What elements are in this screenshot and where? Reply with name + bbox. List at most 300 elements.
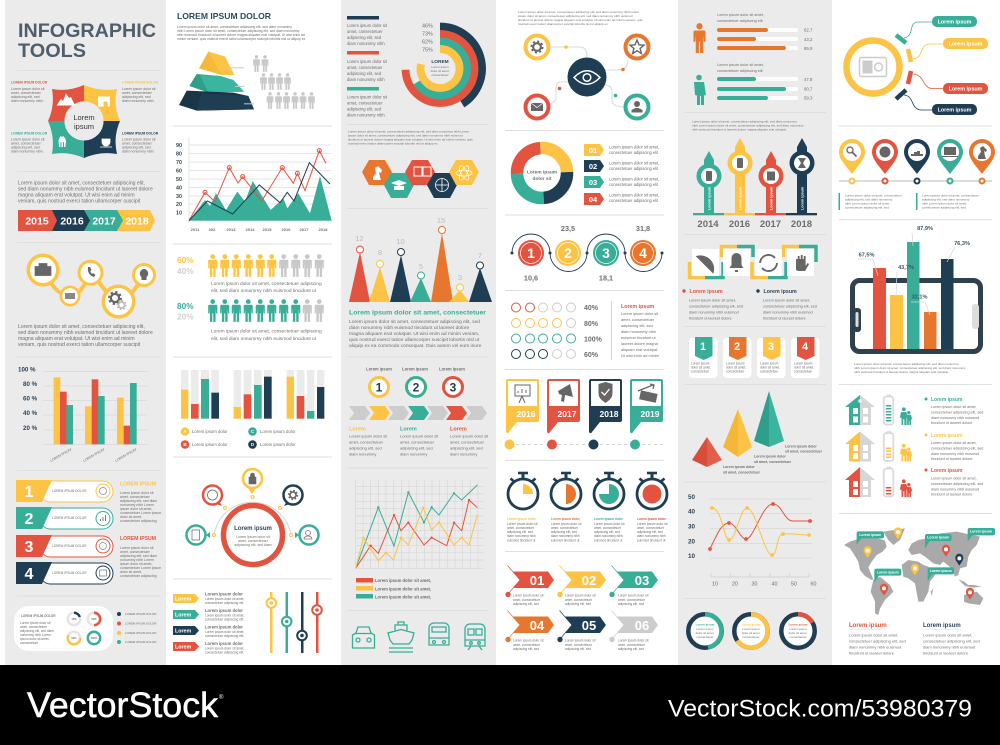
safe diagram: Lorem ipsum [938,108,972,114]
tag 06: adipiscing elit, sed [618,647,644,651]
sliders [266,592,322,653]
arc chart legend: amet, consectetuer [347,100,383,106]
text block: nibh Lorem ipsum dolor sit amet, consectetuer adipiscing elit, sed diam nonummy [692,124,804,128]
row text: diam nonummy nibh euismod [931,488,979,492]
four-part ring diagram: ipsum [74,122,94,131]
tower captions [708,186,804,210]
smooth line chart: 30 [688,524,696,530]
pictogram: 60 / 40 [177,254,324,294]
row: green [845,394,912,425]
tag 03: Lorem ipsum dolor sit [618,594,649,598]
row text: tincidunt ut laoreet dolore [931,457,972,461]
list side text: nonummy nibh Lorem [120,503,154,507]
tag 02: amet, consectetuer [565,598,593,602]
dot rows side text: adipiscing elit, sed [621,323,653,328]
hanging number tags: Lorem ipsum [726,362,745,366]
list side text: LOREM IPSUM [120,482,156,488]
icon: person node [626,96,648,118]
hanging number tags [689,337,820,378]
panel: column 5 [682,13,826,648]
dot rows side text: diam nonummy nibh [621,329,656,334]
stopwatches [508,473,667,509]
two text columns: consectetuer adipiscing elit, sed [689,304,743,308]
stopwatch captions: Lorem ipsum dolor sit [507,522,538,526]
label list: Lorem ipsum dolor [205,641,243,646]
step process: Lorem ipsum [439,366,465,372]
pictogram: 80 / 20: 80% [177,301,194,311]
three ring gauges [688,614,815,648]
icon: car [352,627,374,648]
tag 01: adipiscing elit, sed [513,602,539,606]
tag 04: amet, consectetuer [513,643,541,647]
line and area chart: 60 [176,168,182,174]
dot rows side text: amet, consectetuer [621,317,655,322]
ring labels: adipiscing elit, sed [122,95,151,99]
text block: magna aliquam erat volutpat. Ut wisi enim ad minim [18,336,135,342]
map pins timeline: adipiscing elit, sed diam nonummy [922,198,970,202]
row 4 [16,562,113,584]
watermark url: VectorStock.com/53980379 [668,696,972,722]
stacked bars legend: Lorem ipsum dolor [192,442,228,447]
ring labels: LOREM IPSUM DOLOR [122,80,159,84]
safe diagram: Lorem ipsum [949,42,983,48]
text block: nibh euismod tincidunt ut laoreet dolore magna aliquam erat volutpat. [692,128,787,132]
card: small donuts: LOREM IPSUM DOLOR [21,614,56,618]
phone bar chart: 87,9% [917,226,933,232]
card: small donuts: 15% [71,617,77,621]
line and area chart: 70 [176,160,182,166]
arc chart legend: Lorem ipsum dolor sit [347,94,388,100]
icon: train [465,624,485,650]
map captions: diam nonummy nibh euismod [849,644,901,650]
three ring gauges: Lorem ipsum [696,622,715,626]
label list: Lorem [175,628,191,634]
label list: Lorem ipsum dolor sit amet, [205,597,244,601]
tag 04: 04 [530,618,545,633]
step process: diam nonummy [349,452,376,456]
map captions: consectetuer adipiscing elit, sed [923,638,980,644]
map pins timeline: consectetuer adipiscing elit, sed [922,206,966,210]
hanging number tags: Lorem ipsum [691,362,710,366]
stacked bars legend [181,427,296,449]
two text columns: tincidunt ut laoreet dolore [763,316,806,320]
label list [173,592,244,654]
map pins [857,527,995,600]
ring labels: adipiscing elit, sed [11,95,40,99]
stopwatch captions: Lorem ipsum dolor sit [594,522,625,526]
stopwatch 2 [551,473,581,509]
hub network [526,36,648,118]
tag 05 [557,610,606,651]
tag 03: 03 [635,573,649,588]
bar chart: 20 % [23,425,38,432]
dot rows side text: aliquam erat volutpat. [621,347,658,352]
arc chart legend: adipiscing elit, sed [347,106,382,112]
two text columns: diam nonummy nibh euismod [689,310,739,314]
text block: veniam, quis nostrud exerci tation ullamcorper suscipit [18,342,141,348]
step process: 1 [376,380,383,394]
ring labels: Lorem ipsum dolor sit [11,87,44,91]
3D pyramid [179,52,254,111]
concentric arc chart: consectetuer [431,73,449,77]
row: yellow [845,431,912,462]
map captions: tincidunt ut laoreet dolore [849,650,895,656]
map pins timeline: Lorem ipsum dolor sit amet, consectetuer [922,194,979,198]
smooth line chart: 20 [732,582,738,588]
hanging number tags: 1 [700,341,706,353]
stopwatch captions: euismod tincidunt ut [551,538,579,542]
hanging number tags: 2 [734,341,740,353]
step process: adipiscing elit, sed [349,446,382,450]
hanging number tags: dolor sit amet, [760,366,780,370]
hanging number tags: 4 [802,341,809,353]
tag 01 [505,566,554,606]
card: small donuts: Lorem ipsum dolor sit [20,621,51,625]
bar chart: 100 % [18,366,36,374]
tag 01: Lorem ipsum dolor sit [513,594,544,598]
donut legend: Lorem ipsum dolor sit amet, [609,192,660,198]
line and area chart: 40 [176,186,182,192]
concentric arc chart: 75% [422,48,433,54]
icon: bell [730,253,744,272]
row text: tincidunt ut laoreet dolore [931,421,972,425]
3D cones: sit amet, consectetuer [723,470,761,474]
text block: Lorem ipsum dolor sit amet, consectetuer adipiscing elit, sed diam nonummy [854,362,959,366]
tag 06 [609,610,658,651]
step process: amet, consectetuer [349,440,384,444]
step process: 3 [450,380,457,394]
row text: Lorem ipsum dolor sit amet, [931,441,976,445]
list side text: amet, consectetuer [120,550,151,554]
list side text: consectetuer adipiscing [120,574,157,578]
male bars [694,13,813,53]
numbered circle wave: 23,5 [561,224,575,233]
text block: quis nostrud exerci tation ullamcorper suscipit lobortis nisl ut [349,337,480,343]
concentric arc chart: dolor sit amet, [431,69,450,73]
text block: magna aliquam erat volutpat. Ut wisi enim ad minim [18,192,135,198]
tag 05: adipiscing elit, sed [565,647,591,651]
card: small donuts: consectetuer [20,641,39,645]
pictogram rows: pyramid [253,55,315,109]
line and area chart: 50 [176,177,182,183]
list side text: Lorem ipsum dolor sit [120,491,153,495]
intro text: Lorem ipsum dolor sit amet, consectetuer adipiscing elit, sed diam nonummy [177,25,292,29]
stopwatch captions: adipiscing elit, sed [507,530,533,534]
stopwatch captions: Lorem ipsum dolor sit [551,522,582,526]
concentric arc chart: 73% [422,32,433,38]
donut chart: Lorem ipsum [527,170,557,176]
triangle peak chart: 15 [437,216,445,225]
pictogram: 60 / 40: 60% [177,255,194,265]
tag 04 [505,610,554,651]
year ribbon: 2016 [60,216,84,228]
hexagon chain [362,160,479,198]
card: small donuts: 50% [91,617,97,621]
smooth line chart [688,494,816,588]
stopwatch captions: diam nonummy nibh [551,534,580,538]
row 3: LOREM IPSUM DOLOR [52,544,87,548]
row text: consectetuer adipiscing elit, sed [931,482,983,486]
text block [348,130,473,146]
title: INFOGRAPHIC [18,21,156,42]
text block: Lorem ipsum dolor sit amet, consectetuer adipiscing elit, [18,324,145,330]
tag 01: 01 [530,573,544,588]
map pins timeline: adipiscing elit, sed diam nonummy [845,198,893,202]
world map: Lorem ipsum [930,569,952,573]
donut legend: 01 [589,146,597,155]
text block: Lorem ipsum dolor sit amet, consectetuer adipiscing elit, sed diam nonummy nibh Lorem [348,130,470,134]
tag 06: 06 [635,618,649,633]
two text columns [682,289,817,320]
list side text: dolor sit amet, [120,515,142,519]
card: small donuts: LOREM IPSUM DOLOR [125,612,156,616]
step process: amet, consectetuer [400,440,435,444]
row text: Lorem ipsum dolor sit amet, [931,476,976,480]
card: small donuts: 60% [71,636,77,640]
label list: consectetuer adipiscing elit. [205,634,244,638]
tower arrows: 2014 [697,219,719,230]
stopwatch captions: Lorem ipsum dolor [594,517,624,521]
step process: 2 [413,380,420,394]
icon: ship [388,622,414,652]
icon: hand [796,255,809,271]
tag 05: Lorem ipsum dolor sit [565,638,596,642]
icon: eye [568,58,606,96]
label list: Lorem ipsum dolor [205,608,243,613]
donut legend: Lorem ipsum dolor sit amet, [609,144,660,150]
dot rows side text: Lorem ipsum [621,304,655,310]
donut legend: Lorem ipsum dolor sit amet, [609,176,660,182]
heading: LOREM IPSUM DOLOR [177,11,271,21]
bar chart: LOREM IPSUM [82,447,105,463]
female bars: 90,7 [804,86,813,92]
node: lock [243,469,262,494]
tower arrows: 2017 [760,219,781,230]
radial centre text: Lorem ipsum dolor sit [236,535,270,539]
numbered circle wave: 1 [527,245,535,261]
map captions: Lorem ipsum dolor sit amet, [849,632,898,638]
3D cones: Lorem ipsum dolor [785,444,817,448]
male bars: 43,2 [804,37,813,42]
list side text [120,482,161,578]
three ring gauges: Lorem ipsum [742,622,761,626]
male bars: 89,8 [804,46,813,51]
step process: Lorem [349,426,366,432]
step process: Lorem [450,426,467,432]
icon: bulb [140,269,148,280]
icon: gear node [526,36,548,58]
tower 2017 [758,151,784,213]
green heading: Lorem ipsum dolor sit amet, consectetuer [349,310,487,316]
3D cones: Lorem ipsum dolor [723,465,755,469]
row 2: LOREM IPSUM DOLOR [52,516,87,520]
icon: gears [109,292,121,304]
stopwatch captions: amet, consectetuer [594,526,622,530]
arc chart legend: diam nonummy nibh [347,112,385,118]
concentric arc chart [406,24,482,104]
male bars: consectetuer adipiscing elit [717,19,764,23]
two text columns: Lorem ipsum [764,289,797,295]
tower arrows [693,138,817,230]
row text: consectetuer adipiscing elit, sed [931,410,983,414]
step process: Lorem [400,426,417,432]
panel: column 1 [11,21,161,651]
label list: Lorem [175,612,191,618]
tag 03 [609,566,658,606]
list side text: dolor sit amet, [120,570,142,574]
row text: tincidunt ut laoreet dolore [931,492,972,496]
row text: Lorem ipsum dolor sit amet, [931,405,976,409]
list side text: ipsum dolor sit amet, [120,507,152,511]
card: small donuts: LOREM IPSUM DOLOR [125,640,156,644]
list side text: nonummy nibh Lorem [120,558,154,562]
ring labels: diam nonummy nibh. [122,150,155,154]
smooth line chart: 40 [688,508,696,516]
3D cones: sit amet, consectetuer [754,460,792,464]
triangle peak chart: 8 [378,248,382,257]
four-part ring diagram: Lorem [73,113,95,122]
label list: consectetuer adipiscing elit. [205,601,244,605]
three ring gauges: dolor sit amet, [789,631,808,635]
multi-line grid chart [356,480,483,600]
three ring gauges: dolor sit amet, [742,631,761,635]
card 2016: 2016 [517,409,536,419]
stacked bars legend: A [183,429,187,434]
card: small donuts: 100% [91,636,98,640]
donut chart [517,148,567,198]
dot rows side text: laoreet dolore magna [621,341,659,346]
card: small donuts: ipsum dolor sit amet, [20,637,50,641]
arc chart legend: adipiscing elit, sed [347,35,382,40]
icons in hexagons [373,166,382,180]
row 3: 3 [25,539,34,556]
text block: ipsum dolor sit amet, consectetuer adipiscing elit, sed diam nonummy nibh euismod [348,134,463,138]
text block: sed diam nonummy nibh euismod tincidunt ut laoreet dolore [18,186,153,192]
safe diagram: Lorem ipsum [938,20,972,26]
dot row percentages: 40% [584,305,599,312]
phone bar chart: 67,5% [859,252,874,258]
ring labels: amet, consectetuer [11,142,42,146]
three ring gauges: Lorem ipsum [789,622,808,626]
stacked bars legend: B [183,442,187,447]
hanging number tags: dolor sit amet, [726,366,746,370]
row text: Lorem ipsum [931,397,963,403]
bar chart: 40 % [23,410,38,417]
stopwatch captions: Lorem ipsum dolor [507,517,537,521]
line and area chart: 30 [176,194,182,200]
intro text [177,25,306,41]
line and area chart: 2017 [300,227,309,232]
tag 06: Lorem ipsum dolor sit [618,638,649,642]
stopwatch captions: euismod tincidunt ut [507,538,535,542]
icon: mail node [526,96,548,118]
stopwatch captions: amet, consectetuer [637,526,665,530]
label list: Lorem ipsum dolor sit amet, [205,646,244,650]
phone bar chart: 32,1% [912,294,927,300]
text block: aliquip ex ea commodo consequat. Duis autem vel eum iriure [349,343,482,349]
node: document [186,526,210,544]
panel: column 4 [504,10,668,651]
text block: nibh euismod tincidunt ut laoreet dolore magna aliquam erat volutpat. [854,370,949,374]
line and area chart: 20 [176,202,182,208]
list side text: consectetuer Lorem ipsum [120,511,161,515]
arc chart legend: amet, consectetuer [347,29,383,34]
concentric arc chart: 46% [422,24,433,30]
line and area chart: 2014 [246,227,255,232]
label list: Lorem [175,596,191,602]
stopwatch captions: diam nonummy nibh [637,534,666,538]
dot row percentages: 60% [584,352,599,359]
arc chart legend: Lorem ipsum dolor sit [347,23,388,28]
arrow tags 01-06 [505,566,658,651]
stopwatch captions: adipiscing elit, sed [551,530,577,534]
smooth line chart: 50 [791,582,797,588]
card: small donuts: amet, consectetuer [20,625,48,629]
tower captions: Lorem ipsum [770,186,774,210]
radial centre text: Lorem ipsum [234,526,272,532]
ring labels: diam nonummy nibh. [11,150,44,154]
icon: star node [626,36,648,58]
hanging number tags: consectetuer [760,370,779,374]
panel: column 2 [173,11,332,654]
row 1 [16,480,113,502]
numbered circle wave: 3 [602,245,610,261]
line and area chart: 202 [209,227,216,232]
pictogram: 60 / 40: Lorem ipsum dolor sit amet, consectetuer adipiscing [211,281,322,287]
arc chart legend [347,16,388,118]
text block: tincidunt ut laoreet dolore magna aliquam erat volutpat. Ut wisi enim ad minim veniam, quis [348,138,473,142]
stopwatch captions: Lorem ipsum dolor [637,517,667,521]
pictogram: 80 / 20: Lorem ipsum dolor sit amet, consectetuer adipiscing [211,328,322,334]
row text: consectetuer adipiscing elit, sed [931,446,983,450]
donut legend: consectetuer adipiscing elit [609,166,659,171]
step process: Lorem ipsum [366,366,392,372]
ring labels: adipiscing elit, sed [11,146,40,150]
stopwatch captions: euismod tincidunt ut [637,538,665,542]
donut legend: 03 [589,178,597,187]
tag 04: adipiscing elit, sed [513,647,539,651]
intro text [518,10,643,26]
ring labels: adipiscing elit, sed [122,146,151,150]
two text columns: tincidunt ut laoreet dolore [689,316,732,320]
arc chart legend: adipiscing elit, sed [347,71,382,76]
safe diagram: Lorem ipsum [949,86,983,92]
text block: veniam, quis nostrud exerci tation ullamcorper suscipit [18,198,141,204]
dot row percentages [584,305,603,359]
tag 03: amet, consectetuer [618,598,646,602]
step process: amet, consectetuer [450,440,485,444]
stopwatch captions: amet, consectetuer [507,526,535,530]
dot rows side text [621,304,659,358]
label list: Lorem ipsum dolor sit amet, [205,614,244,618]
text block: Lorem ipsum dolor sit amet, consectetuer adipiscing elit, sed diam nonummy [692,120,797,124]
donut legend: consectetuer adipiscing elit [609,150,659,155]
bar chart [18,366,147,463]
year ribbon: 2018 [125,216,149,228]
stopwatch captions: adipiscing elit, sed [637,530,663,534]
dot rows side text: euismod tincidunt ut [621,335,657,340]
row 2: 2 [25,511,34,528]
title: TOOLS [18,41,86,62]
bar chart: 60 % [23,396,38,402]
stopwatch captions: diam nonummy nibh [507,534,536,538]
female bars: 59,3 [804,96,813,100]
map captions: consectetuer adipiscing elit, sed [849,638,906,644]
row 4: LOREM IPSUM DOLOR [52,571,87,575]
stopwatch captions: Lorem ipsum dolor [551,517,581,521]
female bars: 47,8 [804,77,813,82]
pin icons [847,146,987,159]
